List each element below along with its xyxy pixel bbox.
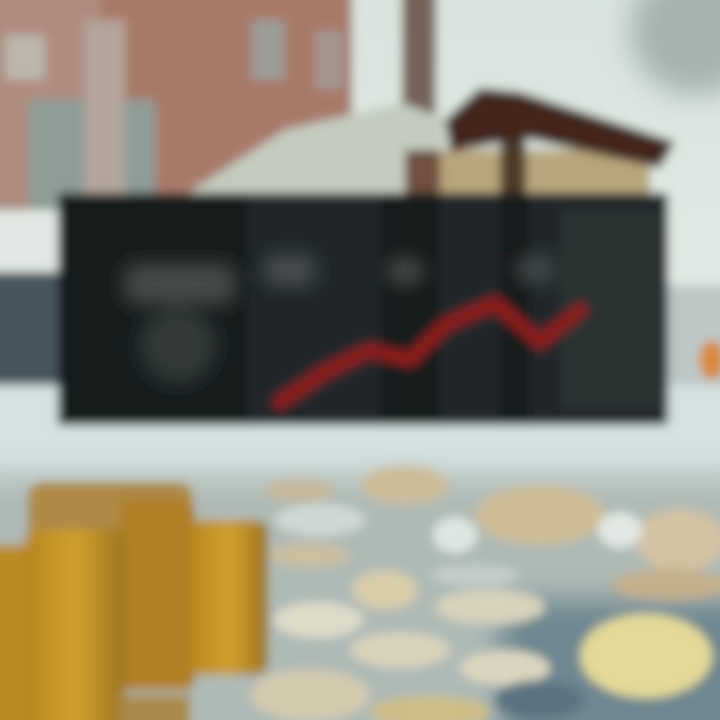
chimney: [402, 0, 436, 115]
dark tree corner: [630, 0, 720, 95]
factory shed: [405, 88, 675, 200]
board heading block: [125, 265, 235, 303]
red trend line: [280, 303, 580, 402]
right distant ground: [660, 285, 720, 385]
board label two: [388, 258, 422, 284]
brick building: [0, 0, 352, 210]
left distant ground: [0, 215, 60, 390]
dark chart board: [58, 193, 668, 425]
shed wall: [420, 150, 650, 200]
lower table: [0, 475, 720, 720]
shield icon: [140, 307, 216, 383]
board label one: [265, 255, 315, 285]
pale roof: [185, 103, 445, 200]
shed roof: [445, 88, 675, 168]
scattered coins: [250, 465, 720, 720]
board label three: [518, 255, 554, 283]
snowy ground: [0, 385, 720, 485]
board icons: [125, 255, 554, 383]
gold coin stacks: [0, 482, 268, 720]
large pale coin: [580, 614, 712, 698]
